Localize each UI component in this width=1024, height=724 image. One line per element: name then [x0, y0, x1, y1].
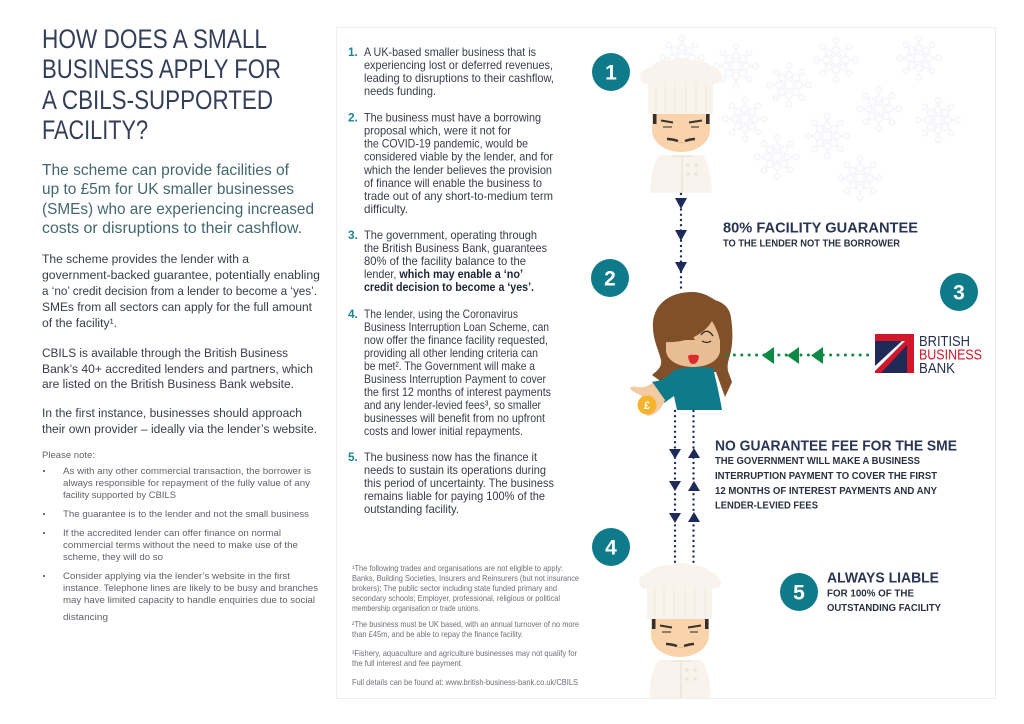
badge 1: 1 — [605, 62, 617, 84]
step 2: the COVID-19 pandemic, would be — [364, 136, 528, 150]
step 4: Business Interruption Payment to cover — [364, 372, 546, 386]
step 5: The business now has the finance it — [364, 450, 538, 464]
arrows: lender and chef two-way — [669, 411, 700, 565]
logo: British Business Bank — [875, 334, 982, 377]
step 3: 3. — [348, 228, 358, 242]
callout: no guarantee fee: LENDER-LEVIED FEES — [715, 500, 818, 512]
step 2: of finance will enable the business to — [364, 176, 542, 190]
please note list: Consider applying via the lender’s website in the first — [63, 571, 290, 582]
step 1: needs funding. — [364, 84, 436, 98]
icon: lender woman — [630, 292, 732, 416]
badge 2: 2 — [604, 268, 616, 290]
please note list: distancing — [63, 612, 108, 623]
step 1 — [348, 45, 554, 98]
step 5: remains liable for paying 100% of the — [364, 489, 545, 503]
callout: no guarantee fee — [715, 438, 957, 512]
step 2: considered viable by the lender, and for — [364, 150, 553, 164]
icon: lender woman: £ — [644, 400, 650, 412]
callout: 80% facility guarantee: TO THE LENDER NOT THE BORROWER — [723, 238, 900, 250]
step 2: difficulty. — [364, 202, 408, 216]
please note list: always responsible for repayment of the fully value of any — [63, 478, 310, 489]
title — [42, 24, 281, 145]
footnotes: ³Fishery, aquaculture and agriculture businesses may not qualify for — [352, 649, 577, 658]
step 5: this period of uncertainty. The business — [364, 476, 554, 490]
callout: 80% facility guarantee: 80% FACILITY GUARANTEE — [723, 220, 918, 236]
please note list: instance. Telephone lines are likely to be busy and branches — [63, 583, 318, 594]
step 3: credit decision to become a ‘yes’. — [364, 280, 534, 294]
step 2: proposal which, were it not for — [364, 124, 511, 138]
step 4 — [348, 307, 551, 438]
intro text: a ‘no’ credit decision from a lender to become a ‘yes’. — [42, 284, 317, 298]
footnotes — [352, 564, 579, 687]
badge 1 — [592, 53, 630, 91]
please note list: As with any other commercial transaction, the borrower is — [63, 466, 311, 477]
intro text: SMEs from all sectors can apply for the full amount — [42, 300, 313, 314]
footnotes: brokers); The public sector including state funded primary and — [352, 584, 557, 593]
please note list: commercial terms without the need to make use of the — [63, 540, 298, 551]
step 4: be met². The Government will make a — [364, 359, 535, 373]
intro text: are listed on the British Business Bank website. — [42, 377, 294, 391]
arrow: bank to lender — [727, 347, 868, 364]
please note list: may have limited capacity to handle enquiries due to social — [63, 595, 315, 606]
step 3: the British Business Bank, guarantees — [364, 241, 547, 255]
step 4: 4. — [348, 307, 358, 321]
step 3: lender, which may enable a ‘no’ — [364, 267, 523, 281]
footnotes: ¹The following trades and organisations are not eligible to apply: — [352, 564, 563, 573]
intro text: of the facility¹. — [42, 316, 117, 330]
please note list: The guarantee is to the lender and not the small business — [63, 509, 309, 520]
intro text: In the first instance, businesses should approach — [42, 406, 302, 420]
step 1: leading to disruptions to their cashflow, — [364, 71, 554, 85]
step 4: providing all other lending criteria can — [364, 346, 538, 360]
panel: process — [336, 28, 996, 698]
callout: 80% facility guarantee — [723, 220, 918, 250]
footnotes: membership organisation or trade unions. — [352, 604, 480, 613]
step 2: 2. — [348, 110, 358, 124]
icon: chef (repaying business) — [639, 563, 721, 698]
intro text: their own provider – ideally via the lender’s website. — [42, 422, 317, 436]
callout: no guarantee fee: INTERRUPTION PAYMENT TO COVER THE FIRST — [715, 471, 937, 482]
step 4: businesses will benefit from no upfront — [364, 411, 546, 425]
subtitle — [42, 162, 314, 237]
step 5: needs to sustain its operations during — [364, 463, 546, 477]
step 2: trade out of any short-to-medium term — [364, 189, 553, 203]
step 4: costs and lower initial repayments. — [364, 424, 523, 438]
badge 4 — [592, 528, 630, 566]
footnotes: Banks, Building Societies, Insurers and Reinsurers (but not insurance — [352, 574, 579, 583]
title: BUSINESS APPLY FOR — [42, 54, 281, 84]
footnotes: Full details can be found at: www.british-business-bank.co.uk/CBILS — [352, 678, 578, 687]
step 2: The business must have a borrowing — [364, 110, 541, 124]
step 1: A UK-based smaller business that is — [364, 45, 536, 59]
step 4: now offer the finance facility requested, — [364, 333, 548, 347]
step 2: which the lender believes the provision — [363, 163, 552, 177]
numbered steps — [348, 45, 554, 516]
footnotes: secondary schools; Employer, professional, religious or political — [352, 594, 560, 603]
subtitle: (SMEs) who are experiencing increased — [42, 201, 314, 218]
step 3: The government, operating through — [364, 228, 537, 242]
step 4: The lender, using the Coronavirus — [364, 307, 518, 321]
badge 3: 3 — [953, 282, 965, 304]
arrow: borrower to lender — [675, 194, 687, 292]
step 3 — [348, 228, 547, 294]
please note list: Please note: — [42, 450, 95, 461]
subtitle: costs or disruptions to their cashflow. — [42, 220, 302, 237]
step 4: and any lender-levied fees³, so smaller — [364, 398, 541, 412]
footnotes: ²The business must be UK based, with an annual turnover of no more — [352, 620, 579, 629]
subtitle: The scheme can provide facilities of — [42, 162, 290, 179]
step 5: outstanding facility. — [364, 502, 459, 516]
step 1: 1. — [348, 45, 358, 59]
step 3: 80% of the facility balance to the — [364, 254, 526, 268]
callout: no guarantee fee: NO GUARANTEE FEE FOR THE SME — [715, 438, 957, 454]
logo: British Business Bank: BRITISH — [919, 334, 970, 350]
footnotes: than £45m, and be able to repay the finance facility. — [352, 630, 523, 639]
please note list: If the accredited lender can offer finance on normal — [63, 528, 281, 539]
intro text: government-backed guarantee, potentially enabling — [42, 268, 320, 282]
logo: British Business Bank: BUSINESS — [919, 348, 982, 364]
step 5: 5. — [348, 450, 358, 464]
please note list — [42, 450, 318, 623]
subtitle: up to £5m for UK smaller businesses — [42, 181, 294, 198]
step 4: Business Interruption Loan Scheme, can — [364, 320, 549, 334]
please note list: scheme, they will do so — [63, 552, 163, 563]
step 4: the first 12 months of interest payments — [364, 385, 551, 399]
title: FACILITY? — [42, 115, 148, 145]
icon: chef (borrower) — [640, 58, 722, 193]
callout: always liable: FOR 100% OF THE — [827, 588, 914, 600]
badge 3 — [940, 273, 978, 311]
callout: no guarantee fee: THE GOVERNMENT WILL MAKE A BUSINESS — [715, 456, 920, 467]
callout: no guarantee fee: 12 MONTHS OF INTEREST PAYMENTS AND ANY — [715, 486, 937, 497]
callout: always liable — [827, 570, 941, 614]
step 1: experiencing lost or deferred revenues, — [364, 58, 553, 72]
badge 2 — [591, 259, 629, 297]
callout: always liable: OUTSTANDING FACILITY — [827, 603, 941, 614]
logo: British Business Bank: BANK — [919, 361, 955, 377]
please note list: facility supported by CBILS — [63, 490, 176, 501]
title: A CBILS-SUPPORTED — [42, 85, 273, 115]
intro text — [42, 252, 320, 436]
intro text: Bank’s 40+ accredited lenders and partners, which — [42, 362, 313, 376]
virus background pattern — [660, 36, 960, 200]
badge 5: 5 — [793, 582, 805, 604]
footnotes: the full interest and fee payment. — [352, 659, 463, 668]
badge 5 — [780, 573, 818, 611]
intro text: CBILS is available through the British Business — [42, 346, 288, 360]
step 2 — [348, 110, 553, 216]
badge 4: 4 — [605, 536, 617, 560]
step 5 — [348, 450, 554, 516]
title: HOW DOES A SMALL — [42, 24, 267, 54]
intro text: The scheme provides the lender with a — [42, 252, 249, 266]
callout: always liable: ALWAYS LIABLE — [827, 570, 939, 586]
